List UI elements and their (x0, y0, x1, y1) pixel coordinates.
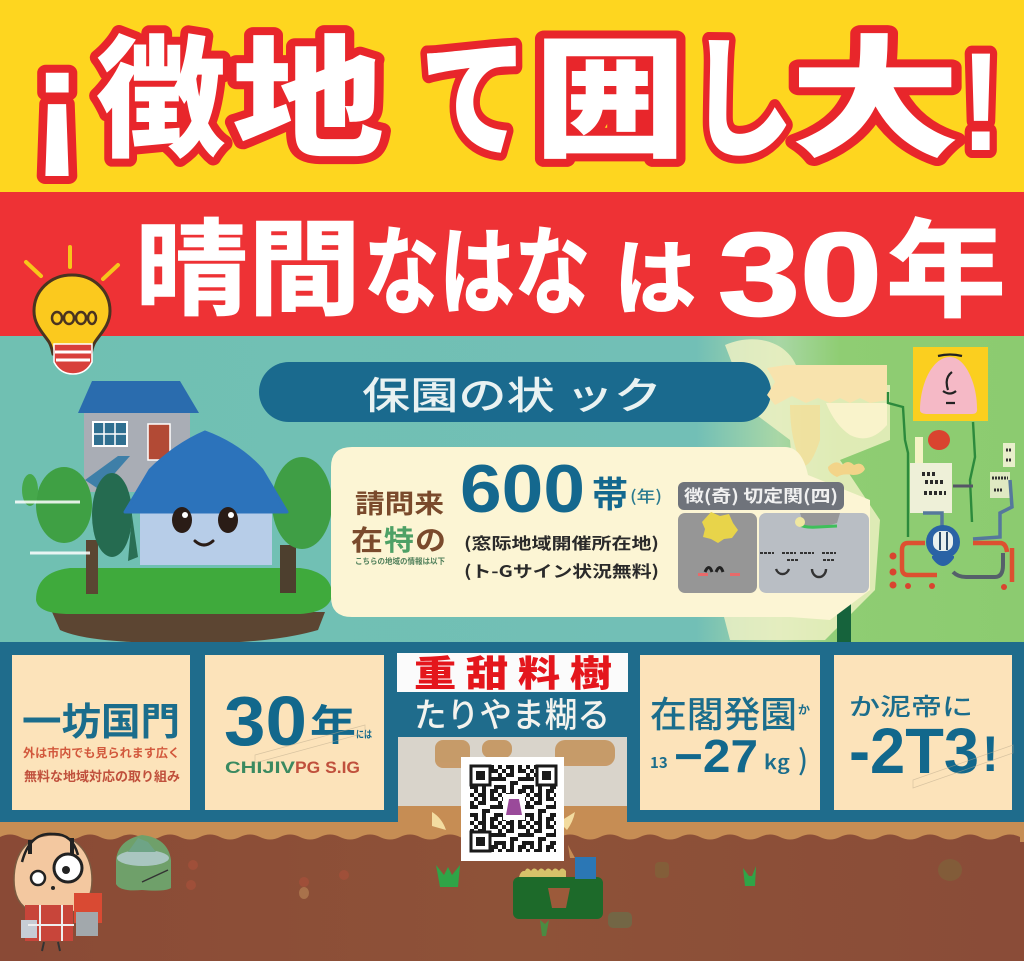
label text: 特 (384, 519, 414, 559)
subtitle headline: なはな (364, 195, 590, 334)
subtitle headline: 30 (718, 209, 882, 341)
red subtitle band (0, 192, 1024, 338)
red notice label: 重 甜 料 樹 (414, 645, 612, 697)
icon: grass tufts (436, 865, 756, 936)
right card smiles (776, 569, 826, 577)
panel: stat card 2 (205, 655, 384, 810)
panel: central cream info card (331, 447, 870, 620)
ground soil (0, 822, 1024, 961)
ground faint sprouts (608, 859, 962, 928)
faint watermark stamps (255, 725, 1013, 788)
dark return pipe (953, 553, 1003, 577)
panel: stat card 2: には (356, 726, 372, 741)
top yellow title band (0, 0, 1024, 192)
panel: stat card 1 (12, 655, 190, 810)
cream ribbon (767, 365, 887, 405)
front house with smiling face (125, 432, 287, 565)
left trees (15, 467, 138, 594)
label text: こちらの地域の情報は以下 (355, 556, 445, 567)
teal ribbon heading: たりやま糊る (414, 688, 610, 737)
600 value: (年) (630, 483, 662, 507)
title: main headline: ! (960, 23, 1002, 180)
island earth (52, 612, 325, 643)
ground pebbles (186, 860, 349, 899)
icon: light bulb (26, 247, 118, 374)
island grass (36, 568, 332, 614)
subtitle headline: 年 (886, 185, 1006, 339)
panel: stat card 3 (640, 655, 820, 810)
blue meter (926, 525, 960, 566)
panel: stat card 4 (834, 655, 1012, 810)
panel: stat card 3: 13 (650, 752, 668, 773)
grey-blue pipe (923, 480, 1012, 539)
grey comparison cards: 徴(奇) 切定関(四) (684, 482, 838, 507)
right card green accent (798, 524, 837, 527)
label text: 在 (351, 519, 383, 559)
orange piping loop (902, 543, 1012, 582)
panel: stat card 4: ! (982, 726, 999, 782)
panel: stat card 4: か泥帝に (849, 687, 973, 722)
right card dark top (800, 513, 840, 527)
panel: stat card 3: ) (798, 739, 808, 779)
panel: stat card 3: −27 (674, 730, 758, 782)
QR code (461, 757, 564, 861)
label text: の (415, 519, 446, 559)
green connector lines (888, 392, 975, 537)
grey comparison cards (678, 482, 869, 593)
red dots (890, 552, 1007, 590)
panel: stat card 3: か (798, 701, 810, 718)
panel: stat card 4: -2T3 (849, 715, 979, 787)
panel: stat card 1: 外は市内でも見られます広く (23, 744, 180, 761)
icon: green backpack (116, 835, 171, 891)
panel: stat card 1: 一坊国門 (22, 691, 180, 746)
panel: stat card 2: 年 (310, 692, 356, 753)
right tree (272, 457, 332, 593)
title: main headline: ¡ (30, 16, 84, 184)
panel: stat card 2: CHIJIV (225, 758, 296, 777)
600 value (460, 451, 662, 527)
panel: map decoration right (767, 347, 1015, 644)
red dot cluster (928, 430, 950, 450)
side unit (990, 443, 1015, 498)
control box (910, 437, 973, 513)
panel: stat card 2: PG S.IG (295, 758, 360, 777)
illustration: floating island with houses and trees (15, 381, 332, 643)
title: main headline (30, 0, 1002, 185)
yellow cloud topper (828, 462, 865, 477)
banner heading (259, 362, 771, 422)
panel: stat card 3: ㎏ (764, 746, 790, 775)
tree trunk (837, 596, 851, 644)
grey card header (678, 482, 844, 510)
label text: 請問来 (355, 484, 444, 521)
blue frame behind cards (0, 642, 1024, 822)
back house (78, 381, 199, 492)
banner heading: 保園の状 ック (362, 365, 662, 420)
subtitle headline: は (614, 212, 696, 331)
yellow splat (702, 512, 738, 543)
panel: stat card 3: 在閣発園 (650, 686, 797, 738)
character: cartoon boy with glasses (14, 834, 102, 951)
subtitle headline (135, 185, 1006, 341)
600 value: 帯 (592, 466, 628, 518)
subtitle headline: 晴間 (135, 185, 361, 336)
parenthetical lines: (窓际地域開催所在地) (464, 530, 659, 554)
panel: stat card 2: 30 (224, 682, 307, 760)
icon: green planter box (513, 845, 603, 919)
panel: stat card 1: 無料な地域対応の取り組み (24, 766, 180, 785)
600 value: 600 (460, 451, 585, 527)
icon: pink bell on yellow (913, 347, 988, 421)
panel: central cream info card: (ト-Gサイン状況無料) (464, 558, 659, 582)
panel: center column with QR (385, 645, 633, 861)
small face left (705, 568, 723, 572)
middle landscape background (0, 336, 1024, 646)
label text (351, 484, 446, 567)
